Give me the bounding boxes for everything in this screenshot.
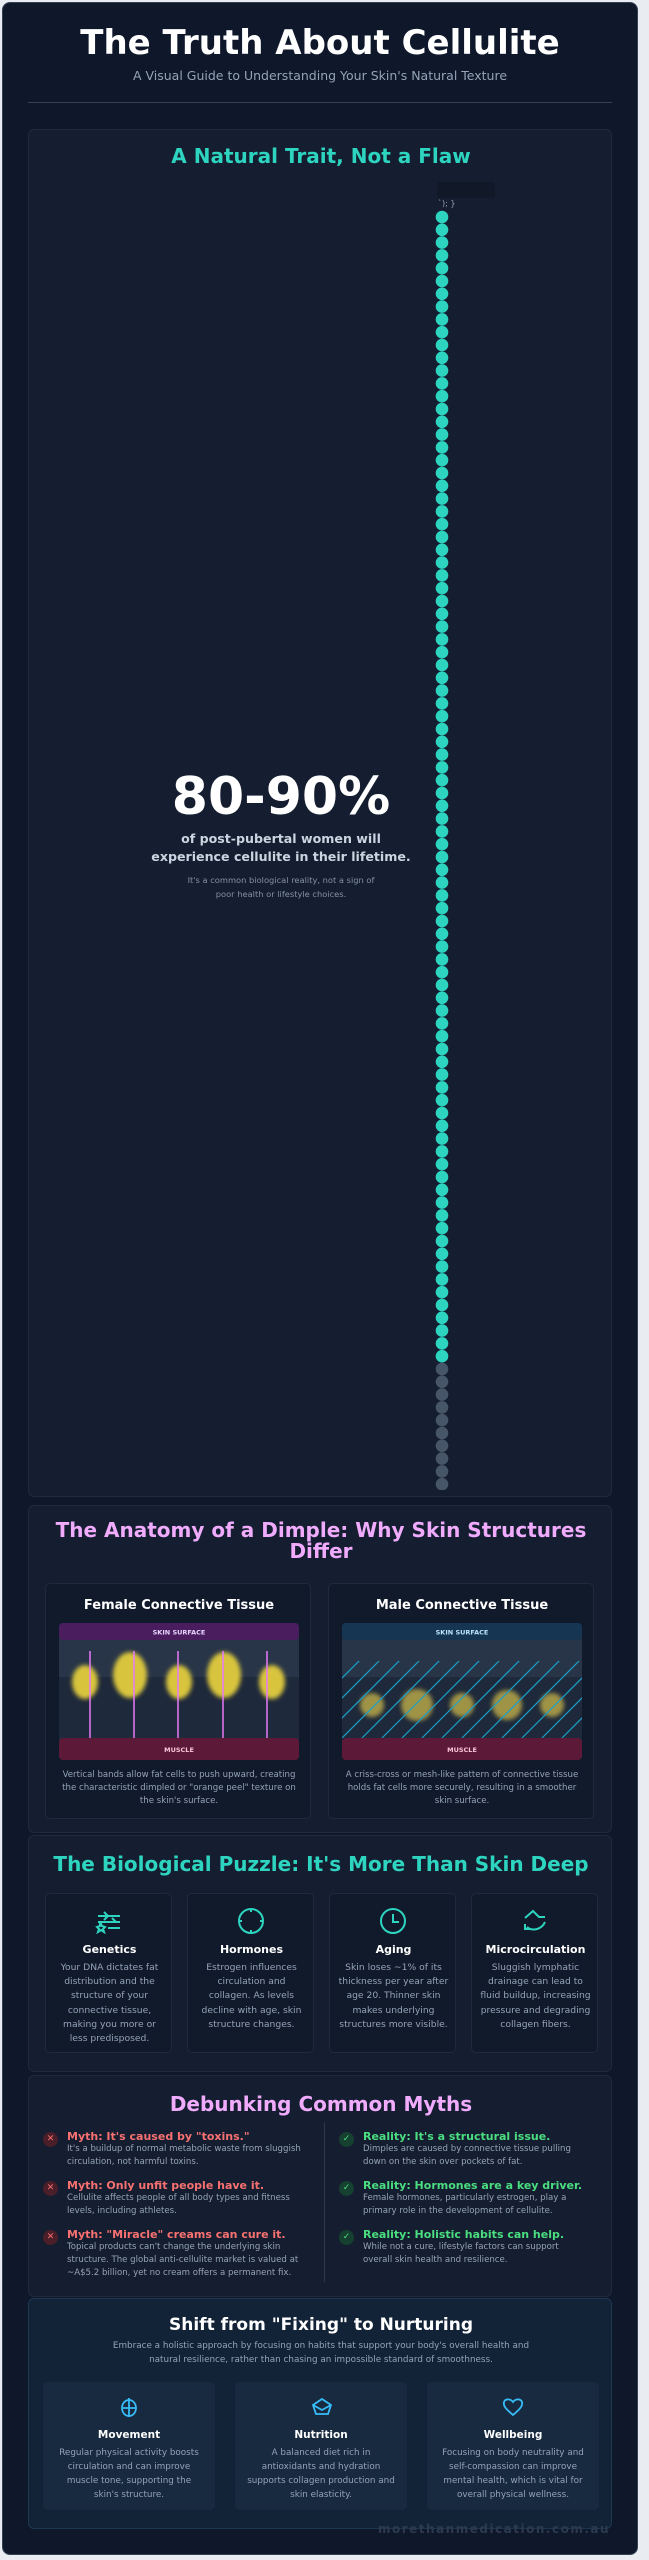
female diagram [59, 1623, 299, 1760]
heading: anatomy: Differ [289, 1539, 353, 1563]
card: male [328, 1583, 594, 1819]
female diagram: SKIN SURFACE [153, 1628, 205, 1636]
reality 3: Reality: Holistic habits can help. [363, 2228, 564, 2241]
icon: nutrition [312, 2398, 332, 2415]
heading: myths: Debunking Common Myths [170, 2092, 472, 2116]
myth 1: Myth: It's caused by "toxins." [67, 2130, 250, 2143]
card: nutrition [235, 2382, 407, 2510]
myth 1: It's a buildup of normal metabolic waste from sluggish circulation, not harmful toxins. [67, 2144, 301, 2167]
myth 3 [43, 2228, 298, 2278]
myth 2: ✕ [47, 2183, 54, 2193]
icon: genetics [95, 1911, 120, 1934]
dot chart: 90 of 100 [436, 210, 448, 1490]
title: genetics: Genetics [83, 1943, 136, 1956]
male title: Male Connective Tissue [376, 1598, 548, 1613]
icon: clock [380, 1908, 406, 1934]
heading: anatomy: The Anatomy of a Dimple: Why Skin Structures [56, 1518, 586, 1542]
icon: hormones [238, 1908, 264, 1934]
card: aging [329, 1893, 456, 2053]
text: microcirculation: Sluggish lymphatic drainage can lead to fluid buildup, increasing pressure and degrading collagen fibers. [480, 1962, 591, 2030]
card: hormones [187, 1893, 314, 2053]
text: nutrition: A balanced diet rich in antioxidants and hydration supports collagen production and skin elasticity. [247, 2448, 395, 2500]
myth 1 [43, 2130, 301, 2167]
panel: myths [28, 2075, 612, 2297]
stray code box [437, 182, 495, 198]
text: aging: Skin loses ~1% of its thickness per year after age 20. Thinner skin makes underlying structures more visible. [339, 1962, 448, 2030]
text: genetics: Your DNA dictates fat distribution and the structure of your connective tissue, making you more or less predisposed. [61, 1962, 158, 2044]
reality 1 [339, 2130, 571, 2167]
reality 2 [339, 2179, 582, 2216]
heading: natural trait: A Natural Trait, Not a Flaw [171, 144, 471, 168]
icon: heart [502, 2398, 524, 2416]
heading: anatomy [56, 1518, 586, 1563]
title: The Truth About Cellulite [80, 23, 560, 63]
panel: natural trait [28, 129, 612, 1497]
statistic: experience cellulite in their lifetime. [151, 849, 411, 864]
reality 2: Female hormones, particularly estrogen, play a primary role in the development of cellulite. [363, 2193, 566, 2216]
text: wellbeing: Focusing on body neutrality and self-compassion can improve mental health, which is vital for overall physical wellness. [442, 2448, 584, 2500]
myth 2: Myth: Only unfit people have it. [67, 2179, 264, 2192]
text: movement: Regular physical activity boosts circulation and can improve muscle tone, supporting the skin's structure. [59, 2448, 199, 2500]
icon: circulation [524, 1910, 546, 1930]
panel: nurturing [28, 2298, 612, 2529]
myth 1: ✕ [47, 2134, 54, 2144]
female diagram: MUSCLE [164, 1746, 194, 1754]
statistic: of post-pubertal women will [181, 831, 381, 846]
footer watermark: morethanmedication.com.au [378, 2522, 610, 2536]
text: hormones: Estrogen influences circulation and collagen. As levels decline with age, skin structure changes. [202, 1962, 301, 2030]
reality 2: Reality: Hormones are a key driver. [363, 2179, 582, 2192]
female title: Female Connective Tissue [84, 1598, 274, 1613]
icon: movement [121, 2398, 137, 2417]
reality 3: ✓ [343, 2232, 350, 2242]
statistic: poor health or lifestyle choices. [216, 889, 346, 899]
title: aging: Aging [376, 1943, 411, 1956]
myth 3: Myth: "Miracle" creams can cure it. [67, 2228, 286, 2241]
male diagram: MUSCLE [447, 1746, 477, 1754]
subtitle: A Visual Guide to Understanding Your Skin's Natural Texture [133, 68, 507, 83]
myth 3: Topical products can't change the underlying skin structure. The global anti-cellulite market is valued at ~A$5.2 billion, yet no cream offers a permanent fix. [67, 2242, 298, 2278]
card: movement [43, 2382, 215, 2510]
title: hormones: Hormones [220, 1943, 283, 1956]
card: wellbeing [427, 2382, 599, 2510]
intro text: Embrace a holistic approach by focusing on habits that support your body's overall health and natural resilience, rather than chasing an impossible standard of smoothness. [113, 2341, 529, 2365]
reality 3 [339, 2228, 564, 2265]
title: microcirculation: Microcirculation [486, 1943, 585, 1956]
card: genetics [45, 1893, 172, 2053]
panel: biological puzzle [28, 1835, 612, 2072]
male diagram [342, 1623, 582, 1760]
statistic [151, 767, 411, 899]
myth 3: ✕ [47, 2232, 54, 2242]
male diagram: SKIN SURFACE [436, 1628, 488, 1636]
reality 3: While not a cure, lifestyle factors can support overall skin health and resilience. [363, 2242, 559, 2265]
statistic: It's a common biological reality, not a sign of [188, 875, 374, 885]
myth 2: Cellulite affects people of all body types and fitness levels, including athletes. [67, 2193, 290, 2216]
title: wellbeing: Wellbeing [484, 2429, 542, 2441]
myth 2 [43, 2179, 290, 2216]
reality 2: ✓ [343, 2183, 350, 2193]
title: movement: Movement [98, 2429, 160, 2441]
card: microcirculation [471, 1893, 598, 2053]
card: female [45, 1583, 311, 1819]
stray code text: `); } [438, 199, 455, 208]
reality 1: Reality: It's a structural issue. [363, 2130, 550, 2143]
male caption: A criss-cross or mesh-like pattern of connective tissue holds fat cells more securely, resulting in a smoother skin surface. [346, 1770, 578, 1806]
heading: nurturing: Shift from "Fixing" to Nurturing [169, 2315, 473, 2335]
reality 1: ✓ [343, 2134, 350, 2144]
heading: puzzle: The Biological Puzzle: It's More Than Skin Deep [53, 1852, 589, 1876]
female caption: Vertical bands allow fat cells to push upward, creating the characteristic dimpled or "orange peel" texture on the skin's surface. [62, 1770, 296, 1806]
panel: anatomy [28, 1505, 612, 1833]
reality 1: Dimples are caused by connective tissue pulling down on the skin over pockets of fat. [363, 2144, 571, 2167]
title: nutrition: Nutrition [294, 2429, 348, 2441]
statistic: 80-90% [172, 767, 390, 827]
